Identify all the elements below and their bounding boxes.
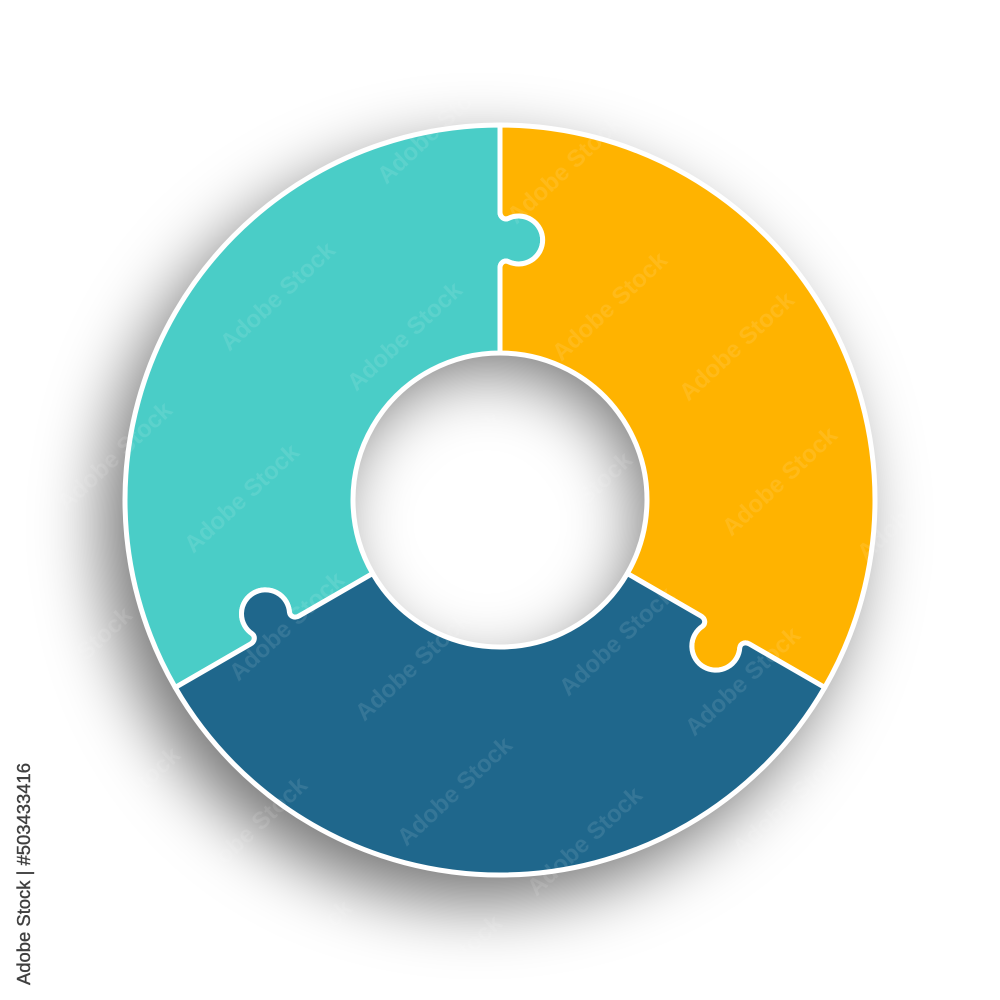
watermark pattern: Adobe Stock — [52, 396, 178, 516]
watermark pattern: Adobe Stock — [547, 246, 673, 366]
watermark pattern: Adobe Stock — [187, 771, 313, 891]
watermark pattern: Adobe Stock — [7, 266, 133, 386]
watermark pattern: Adobe Stock — [877, 254, 1000, 374]
watermark pattern: Adobe Stock — [522, 781, 648, 901]
watermark pattern: Adobe Stock — [42, 64, 168, 184]
watermark pattern: Adobe Stock — [12, 601, 138, 721]
drop shadow of ring — [104, 150, 856, 902]
watermark pattern: Adobe Stock — [215, 236, 341, 356]
watermark pattern: Adobe Stock — [852, 791, 978, 911]
watermark pattern: Adobe Stock — [680, 621, 806, 741]
watermark pattern: Adobe Stock — [392, 731, 518, 851]
watermark pattern: Adobe Stock — [372, 69, 498, 189]
watermark pattern: Adobe Stock — [179, 438, 305, 558]
watermark pattern: Adobe Stock — [707, 39, 833, 159]
watermark pattern: Adobe Stock — [502, 109, 628, 229]
puzzle piece: orange, upper right — [500, 125, 875, 688]
stock id label: Adobe Stock | #503433416 — [14, 763, 34, 985]
watermark pattern: Adobe Stock — [832, 124, 958, 244]
watermark pattern: Adobe Stock — [674, 286, 800, 406]
watermark pattern: Adobe Stock — [512, 446, 638, 566]
watermark pattern: Adobe Stock — [727, 741, 853, 861]
watermark pattern: Adobe Stock — [717, 421, 843, 541]
watermark pattern: Adobe Stock — [224, 566, 350, 686]
watermark pattern: Adobe Stock — [169, 106, 295, 226]
watermark pattern: Adobe Stock — [342, 276, 468, 396]
watermark pattern: Adobe Stock — [60, 741, 186, 861]
watermark pattern: Adobe Stock — [852, 446, 978, 566]
puzzle piece: teal, upper left — [125, 125, 543, 688]
watermark pattern: Adobe Stock — [554, 581, 680, 701]
puzzle piece: dark blue, bottom — [175, 574, 825, 875]
watermark pattern: Adobe Stock — [382, 406, 508, 526]
watermark pattern: Adobe Stock — [350, 606, 476, 726]
